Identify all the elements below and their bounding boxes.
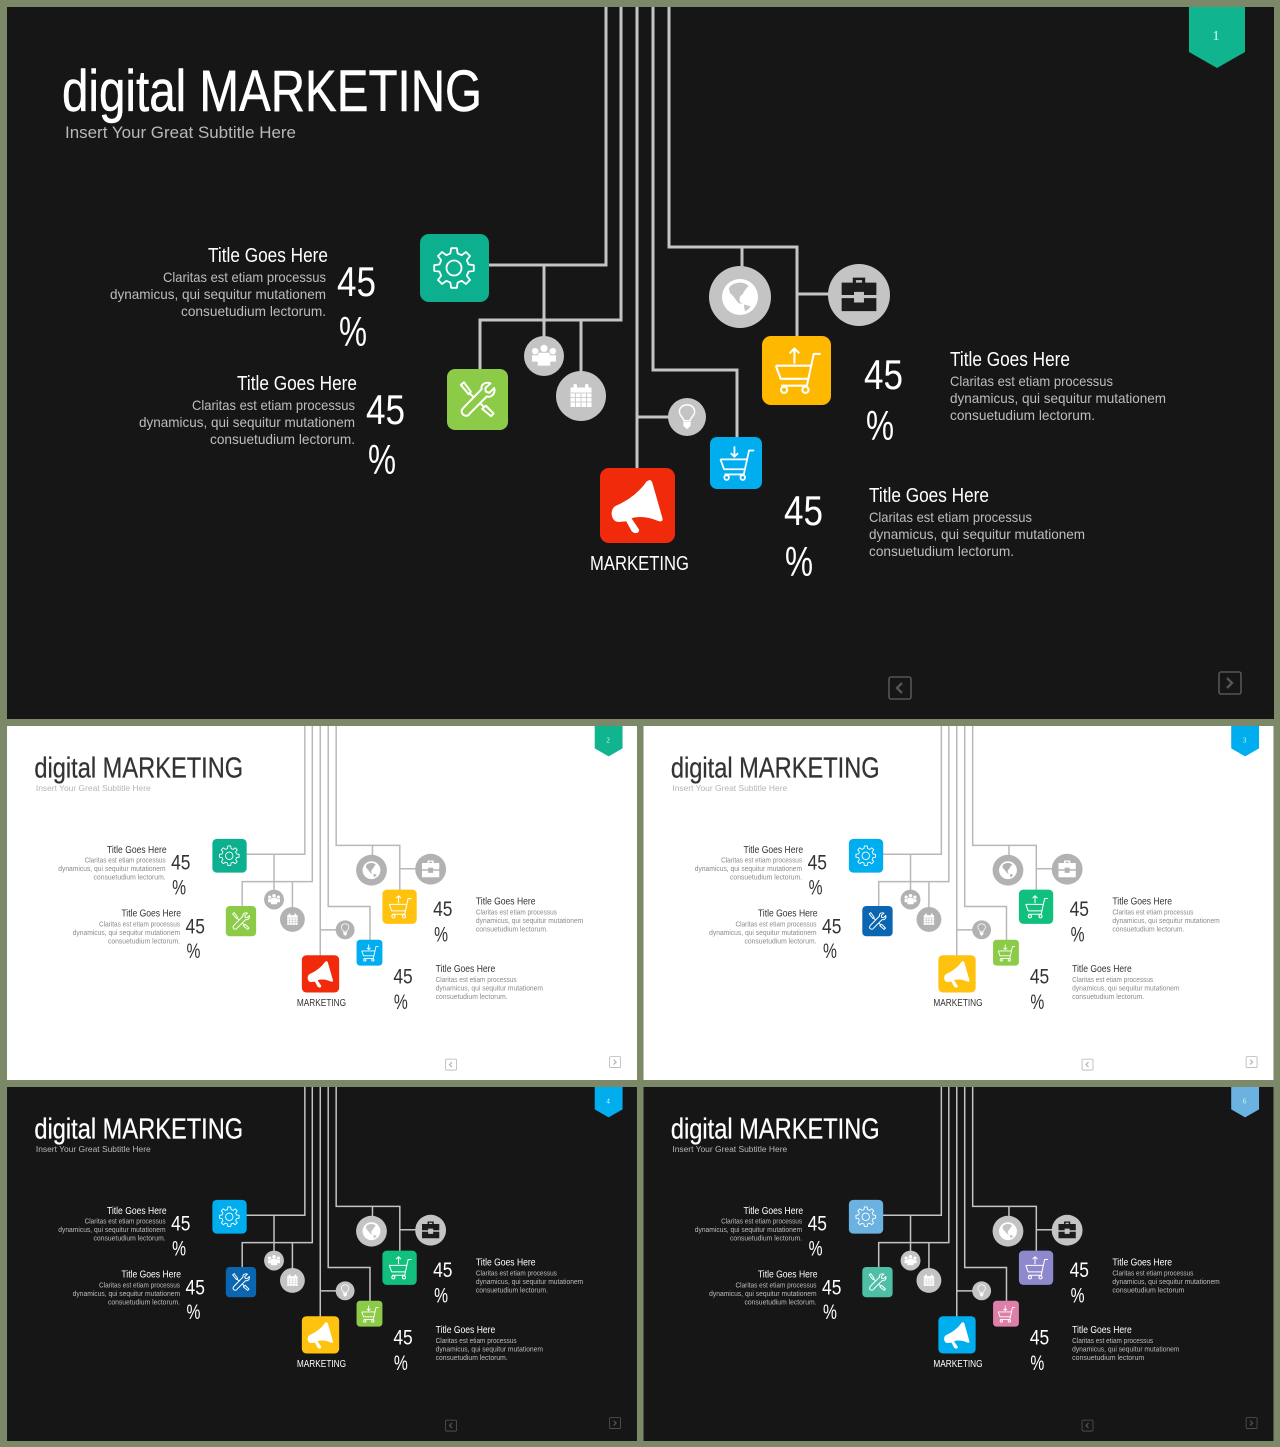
stat: right top <box>1070 898 1089 946</box>
marketing label: MARKETING <box>297 998 346 1009</box>
text block: left top: Title Goes Here <box>743 845 804 856</box>
text block: right bottom: Claritas est etiam processus <box>1072 1338 1154 1345</box>
stat: left top <box>171 1213 190 1261</box>
text block: left bottom: dynamicus, qui sequitur mutationem <box>73 930 180 937</box>
stat: left top <box>171 852 190 900</box>
text block: right bottom: dynamicus, qui sequitur mutationem <box>869 526 1085 542</box>
stat: right top: % <box>1071 923 1085 946</box>
icon: tools <box>862 1267 893 1297</box>
text block: right top: Title Goes Here <box>476 896 536 907</box>
next button <box>610 1057 621 1068</box>
connector lines <box>242 726 416 956</box>
text block: left top <box>110 245 328 319</box>
page badge <box>595 1087 623 1117</box>
icon: calendar <box>280 1268 305 1293</box>
icon: megaphone <box>302 955 339 992</box>
text block: left bottom: consuetudium lectorum. <box>744 938 817 945</box>
slide 5: dark slide, pastel scheme <box>644 1087 1274 1441</box>
text block: right bottom: Title Goes Here <box>1072 964 1132 975</box>
text block: right bottom: consuetudium lectorum. <box>1072 994 1144 1001</box>
text block: left top: Claritas est etiam processus <box>163 269 326 285</box>
text block: right top <box>476 896 583 933</box>
text block: right bottom <box>1072 1325 1180 1362</box>
text block: left top: dynamicus, qui sequitur mutationem <box>58 866 166 873</box>
icon: globe <box>993 855 1023 886</box>
stat: right bottom: 45 <box>1030 966 1049 989</box>
icon: briefcase <box>1052 1215 1083 1246</box>
text block: left bottom: dynamicus, qui sequitur mutationem <box>73 1291 180 1298</box>
text block: left top: Claritas est etiam processus <box>85 1219 166 1226</box>
text block: right bottom: dynamicus, qui sequitur mutationem <box>1072 1347 1180 1354</box>
text block: left top <box>58 1206 167 1243</box>
stat: right bottom: 45 <box>393 1327 413 1350</box>
stat: right top: 45 <box>1070 898 1089 921</box>
text block: left bottom <box>139 373 357 447</box>
stat: right bottom: % <box>1030 991 1044 1014</box>
stat: left bottom: 45 <box>186 1276 205 1299</box>
text block: right top <box>476 1257 583 1294</box>
previous button <box>446 1059 456 1070</box>
text block: left top: dynamicus, qui sequitur mutationem <box>695 866 802 873</box>
text block: right bottom: Title Goes Here <box>1072 1325 1132 1336</box>
slide 4: dark slide, blue scheme <box>7 1087 637 1441</box>
text block: left bottom: consuetudium lectorum. <box>108 938 180 945</box>
stat: right top <box>433 898 453 946</box>
text block: left top <box>695 1206 804 1243</box>
stat: left top: % <box>809 877 823 900</box>
text block: right top <box>950 349 1166 423</box>
stat: left top: 45 <box>808 852 827 875</box>
stat: left bottom: 45 <box>822 915 841 938</box>
previous button <box>446 1420 456 1431</box>
stat: right top <box>1070 1259 1089 1307</box>
text block: left top: consuetudium lectorum. <box>730 875 802 882</box>
text block: right top: Claritas est etiam processus <box>476 909 557 916</box>
icon: cart download <box>993 940 1019 966</box>
next button <box>1219 672 1241 694</box>
icon: tools <box>226 906 256 936</box>
text block: right bottom <box>436 964 543 1001</box>
icon: tools <box>447 369 508 430</box>
text block: left bottom: Title Goes Here <box>237 373 357 395</box>
text block: left top <box>58 845 167 882</box>
stat: right bottom: 45 <box>393 966 413 989</box>
stat: left top <box>808 852 827 900</box>
text block: left top: Title Goes Here <box>107 845 167 856</box>
stat: left bottom <box>822 1276 841 1324</box>
text block: right bottom: Claritas est etiam processus <box>436 1338 517 1345</box>
icon: gear <box>420 234 489 302</box>
text block: left bottom <box>73 1269 181 1306</box>
icon: light bulb <box>972 920 991 939</box>
previous button <box>1082 1059 1093 1070</box>
icon: light bulb <box>336 920 355 939</box>
stat: left bottom: 45 <box>366 386 405 433</box>
icon: globe <box>356 1216 387 1247</box>
marketing label: MARKETING <box>590 553 689 575</box>
stat: left bottom: % <box>187 1301 200 1324</box>
page badge <box>595 726 623 756</box>
stat: right bottom <box>784 487 823 585</box>
text block: right top: consuetudium lectorum <box>1112 1287 1185 1294</box>
text block: right top: consuetudium lectorum. <box>476 926 548 933</box>
stat: left top: % <box>809 1238 823 1261</box>
slide 1: large dark main slide <box>7 7 1274 719</box>
stat: left top: % <box>339 308 367 355</box>
subtitle: Insert Your Great Subtitle Here <box>65 123 296 142</box>
icon: gear <box>849 839 883 873</box>
page badge <box>1189 7 1245 68</box>
text block: right bottom: consuetudium lectorum. <box>436 994 508 1001</box>
text block: left bottom: Claritas est etiam processus <box>99 921 181 928</box>
text block: left top: dynamicus, qui sequitur mutationem <box>58 1227 166 1234</box>
icon: tools <box>862 906 893 936</box>
icon: group <box>901 890 920 909</box>
page badge: 6 <box>1243 1097 1247 1105</box>
subtitle: Insert Your Great Subtitle Here <box>36 1144 151 1154</box>
text block: left bottom: consuetudium lectorum. <box>744 1299 817 1306</box>
text block: left bottom: Title Goes Here <box>758 908 818 919</box>
stat: right bottom: 45 <box>1030 1327 1049 1350</box>
icon: cart download <box>993 1301 1019 1327</box>
text block: left bottom: Title Goes Here <box>758 1269 818 1280</box>
icon: gear <box>849 1200 883 1234</box>
text block: right top: Title Goes Here <box>1112 896 1172 907</box>
text block: left top: Claritas est etiam processus <box>85 858 166 865</box>
next button <box>1246 1057 1257 1068</box>
text block: left bottom: Claritas est etiam processus <box>736 921 817 928</box>
text block: right top <box>1112 896 1220 933</box>
icon: briefcase <box>415 854 446 885</box>
text block: left top: Claritas est etiam processus <box>721 858 803 865</box>
stat: left top <box>337 258 376 355</box>
marketing label: MARKETING <box>933 998 983 1009</box>
text block: left bottom: Title Goes Here <box>121 908 181 919</box>
icon: globe <box>709 266 771 328</box>
page badge: 2 <box>606 736 610 744</box>
stat: left top: 45 <box>171 1213 190 1236</box>
text block: right top: Title Goes Here <box>476 1257 536 1268</box>
marketing label: MARKETING <box>297 1359 346 1370</box>
icon: cart upload <box>382 1251 417 1285</box>
text block: right bottom: Title Goes Here <box>436 1325 496 1336</box>
text block: right bottom: Claritas est etiam processus <box>869 509 1032 525</box>
subtitle: Insert Your Great Subtitle Here <box>36 783 151 793</box>
text block: right bottom: Claritas est etiam processus <box>1072 977 1154 984</box>
stat: left top <box>808 1213 827 1261</box>
text block: right top: Claritas est etiam processus <box>1112 1270 1194 1277</box>
stat: right top: % <box>1071 1284 1085 1307</box>
stat: right top <box>864 351 903 449</box>
stat: right bottom: % <box>394 1352 408 1375</box>
stat: left bottom: % <box>368 436 396 483</box>
text block: right bottom: Claritas est etiam processus <box>436 977 517 984</box>
icon: tools <box>226 1267 256 1297</box>
stat: left top: % <box>172 1238 186 1261</box>
text block: left bottom: dynamicus, qui sequitur mutationem <box>709 1291 817 1298</box>
page badge: 3 <box>1243 736 1247 744</box>
text block: right bottom <box>869 485 1085 559</box>
previous button <box>1082 1420 1093 1431</box>
icon: light bulb <box>972 1281 991 1300</box>
stat: right top: 45 <box>864 351 903 398</box>
connector lines <box>480 7 830 470</box>
text block: right top: dynamicus, qui sequitur mutationem <box>1112 1279 1220 1286</box>
text block: right bottom: consuetudium lectorum. <box>436 1355 508 1362</box>
text block: right bottom: Title Goes Here <box>869 485 989 507</box>
icon: calendar <box>916 907 941 932</box>
stat: right top: 45 <box>1070 1259 1089 1282</box>
text block: right bottom: Title Goes Here <box>436 964 496 975</box>
connector lines <box>879 1087 1053 1317</box>
text block: right bottom: dynamicus, qui sequitur mutationem <box>436 986 543 993</box>
stat: left bottom: % <box>823 940 837 963</box>
icon: group <box>264 890 284 909</box>
text block: right top: Title Goes Here <box>950 349 1070 371</box>
text block: right top: Claritas est etiam processus <box>1112 909 1194 916</box>
text block: left bottom: dynamicus, qui sequitur mutationem <box>709 930 817 937</box>
text block: right top: Title Goes Here <box>1112 1257 1172 1268</box>
text block: right bottom <box>1072 964 1180 1001</box>
icon: cart download <box>710 437 762 489</box>
stat: left bottom: 45 <box>822 1276 841 1299</box>
stat: right top: 45 <box>433 1259 453 1282</box>
stat: right bottom: 45 <box>784 487 823 534</box>
stat: left bottom <box>186 915 205 963</box>
stat: left bottom: % <box>187 940 200 963</box>
page badge: 4 <box>606 1097 610 1105</box>
text block: right top <box>1112 1257 1220 1294</box>
stat: right top: % <box>434 1284 448 1307</box>
stat: left top: % <box>172 877 186 900</box>
text block: right top: dynamicus, qui sequitur mutationem <box>476 1279 583 1286</box>
heading: digital MARKETING <box>62 59 482 124</box>
text block: right bottom: dynamicus, qui sequitur mutationem <box>1072 986 1180 993</box>
icon: globe <box>993 1216 1023 1247</box>
icon: calendar <box>556 371 606 421</box>
stat: right top: % <box>434 923 448 946</box>
icon: cart upload <box>382 890 417 924</box>
heading: digital MARKETING <box>671 1114 880 1146</box>
previous button <box>889 677 911 699</box>
text block: left bottom: consuetudium lectorum. <box>108 1299 180 1306</box>
text block: right bottom: consuetudium lectorum. <box>869 543 1014 559</box>
icon: gear <box>212 839 247 873</box>
page badge: 1 <box>1212 29 1220 44</box>
stat: left bottom <box>822 915 841 963</box>
text block: left top: consuetudium lectorum. <box>94 875 166 882</box>
stat: right bottom: % <box>1030 1352 1044 1375</box>
text block: left bottom: Claritas est etiam processus <box>736 1282 817 1289</box>
stat: right bottom: % <box>785 538 813 585</box>
text block: right bottom: dynamicus, qui sequitur mutationem <box>436 1347 543 1354</box>
icon: megaphone <box>600 468 675 543</box>
icon: calendar <box>916 1268 941 1293</box>
page badge <box>1231 1087 1259 1117</box>
icon: cart upload <box>1019 890 1053 924</box>
text block: left top: Claritas est etiam processus <box>721 1219 803 1226</box>
icon: megaphone <box>938 1316 976 1353</box>
text block: right top: consuetudium lectorum. <box>476 1287 548 1294</box>
page badge <box>1231 726 1259 756</box>
text block: left bottom <box>73 908 181 945</box>
text block: left bottom: consuetudium lectorum. <box>210 431 355 447</box>
icon: megaphone <box>938 955 976 992</box>
text block: left bottom: dynamicus, qui sequitur mutationem <box>139 414 355 430</box>
text block: left bottom: Claritas est etiam processus <box>192 397 355 413</box>
subtitle: Insert Your Great Subtitle Here <box>672 783 788 793</box>
icon: globe <box>356 855 387 886</box>
stat: left top: 45 <box>337 258 376 305</box>
icon: cart download <box>357 940 382 966</box>
text block: right top: dynamicus, qui sequitur mutationem <box>950 390 1166 406</box>
slide 2: white slide <box>7 726 637 1080</box>
stat: right bottom <box>1030 966 1049 1014</box>
text block: left top: Title Goes Here <box>208 245 328 267</box>
icon: light bulb <box>668 398 706 436</box>
stat: left top: 45 <box>808 1213 827 1236</box>
icon: calendar <box>280 907 305 932</box>
text block: left bottom <box>709 908 818 945</box>
slide 3: white slide, blue scheme <box>644 726 1274 1080</box>
icon: group <box>264 1251 284 1270</box>
text block: right bottom: consuetudium lectorum <box>1072 1355 1144 1362</box>
icon: megaphone <box>302 1316 339 1353</box>
text block: left top: dynamicus, qui sequitur mutationem <box>695 1227 802 1234</box>
stat: right bottom <box>393 966 413 1014</box>
text block: left top: consuetudium lectorum. <box>181 303 326 319</box>
stat: right top: % <box>866 402 894 449</box>
text block: left top: Title Goes Here <box>107 1206 167 1217</box>
stat: right top: 45 <box>433 898 453 921</box>
icon: briefcase <box>415 1215 446 1246</box>
icon: cart upload <box>762 336 831 405</box>
stat: left bottom <box>186 1276 205 1324</box>
text block: left bottom: Claritas est etiam processus <box>99 1282 181 1289</box>
marketing label: MARKETING <box>933 1359 983 1370</box>
text block: left bottom <box>709 1269 818 1306</box>
icon: group <box>901 1251 920 1270</box>
text block: left top: Title Goes Here <box>743 1206 804 1217</box>
icon: briefcase <box>1052 854 1083 885</box>
icon: light bulb <box>336 1281 355 1300</box>
heading: digital MARKETING <box>34 1114 243 1146</box>
text block: left top <box>695 845 804 882</box>
text block: right top: consuetudium lectorum. <box>1112 926 1185 933</box>
text block: left top: consuetudium lectorum. <box>730 1236 802 1243</box>
icon: briefcase <box>828 264 890 326</box>
text block: right bottom <box>436 1325 543 1362</box>
stat: left top: 45 <box>171 852 190 875</box>
icon: gear <box>212 1200 247 1234</box>
stat: right top <box>433 1259 453 1307</box>
text block: right top: dynamicus, qui sequitur mutationem <box>1112 918 1220 925</box>
stat: left bottom <box>366 386 405 483</box>
stat: right bottom <box>393 1327 413 1375</box>
stat: left bottom: % <box>823 1301 837 1324</box>
icon: group <box>524 336 564 376</box>
stat: right bottom: % <box>394 991 408 1014</box>
next button <box>610 1418 621 1429</box>
heading: digital MARKETING <box>671 753 880 785</box>
text block: left bottom: Title Goes Here <box>121 1269 181 1280</box>
icon: cart download <box>357 1301 382 1327</box>
next button <box>1246 1418 1257 1429</box>
text block: left top: consuetudium lectorum. <box>94 1236 166 1243</box>
text block: right top: Claritas est etiam processus <box>476 1270 557 1277</box>
icon: cart upload <box>1019 1251 1053 1285</box>
subtitle: Insert Your Great Subtitle Here <box>672 1144 788 1154</box>
connector lines <box>242 1087 416 1317</box>
text block: left top: dynamicus, qui sequitur mutationem <box>110 286 326 302</box>
heading: digital MARKETING <box>34 753 243 785</box>
stat: left bottom: 45 <box>186 915 205 938</box>
stat: right bottom <box>1030 1327 1049 1375</box>
text block: right top: consuetudium lectorum. <box>950 407 1095 423</box>
connector lines <box>879 726 1053 956</box>
text block: right top: dynamicus, qui sequitur mutationem <box>476 918 583 925</box>
text block: right top: Claritas est etiam processus <box>950 373 1113 389</box>
